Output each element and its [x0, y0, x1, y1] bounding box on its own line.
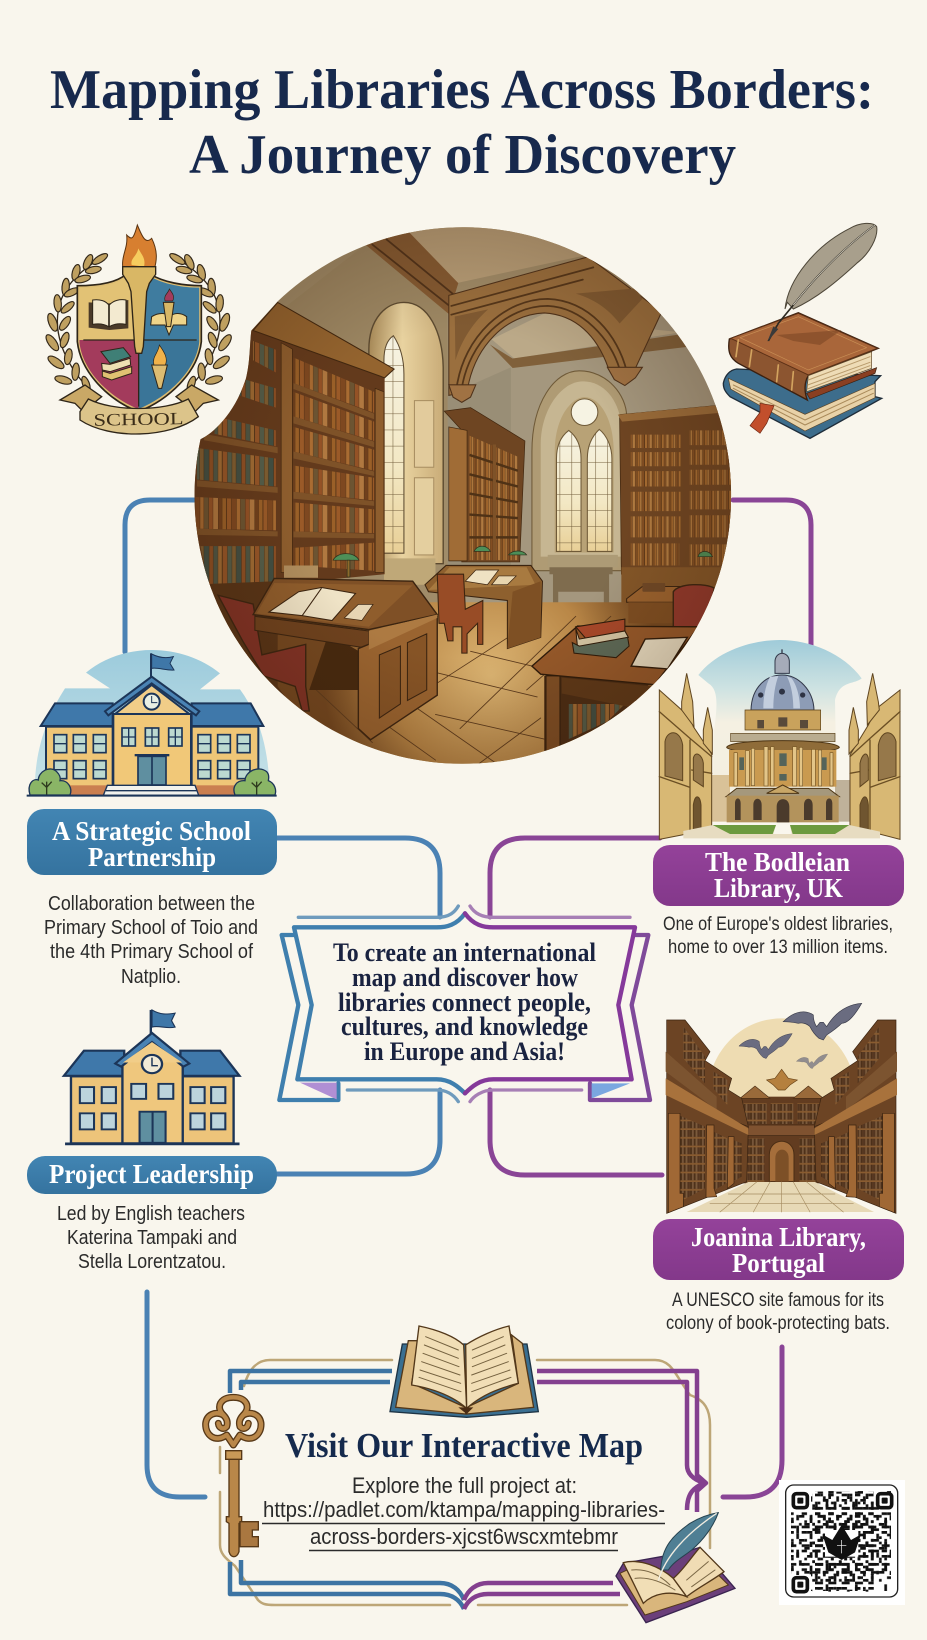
text: leadership description: Katerina Tampaki and — [67, 1226, 237, 1249]
door and steps — [103, 754, 199, 795]
windows — [54, 728, 250, 779]
banner frame — [279, 906, 650, 1102]
crest ornament — [767, 1069, 797, 1090]
right bookcase — [620, 405, 740, 574]
banner text: cultures, and knowledge — [341, 1012, 588, 1041]
lower blue book — [723, 369, 882, 438]
laurel wreath — [44, 252, 234, 393]
text: partnership description: Natplio. — [121, 965, 181, 988]
main desk — [309, 642, 358, 690]
icon: school building with sky — [27, 650, 277, 796]
flag — [151, 653, 174, 677]
right red chair — [673, 585, 714, 627]
background buildings — [712, 775, 730, 822]
badge: A Strategic School Partnership: A Strategic School — [52, 816, 251, 846]
left red chair — [218, 595, 309, 711]
middle chair — [437, 574, 483, 653]
upper brown book — [729, 313, 878, 400]
title — [50, 59, 874, 186]
text: partnership description: Primary School of Toio and — [44, 916, 258, 939]
arch spandrel — [449, 257, 662, 395]
middle desk — [425, 565, 542, 649]
quill feather — [767, 223, 877, 342]
text: leadership description: Stella Lorentzatou. — [78, 1250, 226, 1273]
connector: blue link from leadership to map panel — [147, 1292, 205, 1497]
icon: antique key — [206, 1397, 261, 1557]
icon: stacked books with quill — [723, 223, 882, 438]
text: Joanina description — [666, 1290, 890, 1334]
text: Bodleian description: One of Europe's oldest libraries, — [663, 914, 893, 935]
connector: blue link from leadership badge to banner — [277, 1090, 440, 1174]
connector: blue link from partnership badge to banner — [277, 838, 440, 917]
wings — [41, 677, 263, 795]
badge: Joanina Library, Portugal: Joanina Library, — [691, 1222, 866, 1252]
left cornice — [365, 231, 458, 314]
text: Bodleian description: home to over 13 million items. — [668, 937, 888, 958]
central painting: library reading room — [190, 220, 740, 770]
drum — [726, 710, 839, 822]
badge: Project Leadership: Project Leadership — [49, 1159, 254, 1189]
centre bookcase — [444, 408, 525, 562]
text: Bodleian description — [663, 914, 893, 958]
banner text: map and discover how — [352, 963, 578, 992]
text: padlet url: https://padlet.com/ktampa/mapping-libraries- — [263, 1497, 665, 1522]
text: partnership description — [44, 892, 258, 988]
text: padlet url: across-borders-xjcst6wscxmtebmr — [310, 1524, 618, 1549]
badge: The Bodleian Library, UK — [653, 845, 904, 906]
text: padlet url — [262, 1497, 665, 1550]
title: Mapping Libraries Across Borders: — [50, 59, 874, 121]
connector: purple link from Bodleian to banner — [490, 838, 660, 917]
badge: Joanina Library, Portugal: Portugal — [732, 1248, 825, 1278]
lawn — [683, 825, 880, 838]
heading: visit our interactive map: Visit Our Interactive Map — [285, 1426, 643, 1465]
right back table — [627, 586, 681, 602]
icon: open book with quill — [616, 1513, 735, 1623]
icon: open book on top of frame — [390, 1326, 538, 1417]
side buildings — [659, 673, 900, 839]
connector: top blue line from painting to school — [125, 500, 198, 652]
text: Joanina description: A UNESCO site famous for its — [672, 1290, 884, 1311]
back wall — [742, 1097, 822, 1183]
bats — [739, 1003, 862, 1069]
text: partnership description: the 4th Primary School of — [50, 940, 253, 963]
central banner — [279, 906, 650, 1102]
foreground table — [544, 676, 648, 752]
badge: A Strategic School Partnership — [27, 809, 277, 875]
gold outer frame — [220, 1360, 710, 1605]
title: A Journey of Discovery — [189, 124, 736, 186]
right window — [532, 371, 627, 571]
shield — [77, 274, 202, 412]
text: Joanina description: colony of book-protecting bats. — [666, 1313, 890, 1334]
left bookcase — [190, 302, 393, 592]
icon: second school building — [64, 1010, 240, 1144]
illustration: Joanina Library with bats — [666, 1003, 897, 1213]
back wall — [448, 308, 740, 609]
right wall — [814, 1020, 897, 1213]
ribbon — [60, 385, 218, 434]
banner text: in Europe and Asia! — [364, 1037, 565, 1066]
sky — [35, 650, 269, 795]
torch — [123, 225, 156, 353]
panel: visit our interactive map — [206, 1326, 735, 1623]
sky dome — [707, 1018, 857, 1100]
tiled floor — [687, 1182, 874, 1212]
dome — [751, 649, 814, 710]
badge: The Bodleian Library, UK: Library, UK — [714, 873, 843, 903]
banner text: libraries connect people, — [338, 988, 591, 1017]
ribbon: SCHOOL — [93, 409, 184, 430]
illustration: Bodleian Library — [659, 640, 900, 839]
badge: Project Leadership — [27, 1156, 277, 1194]
lamps — [333, 546, 713, 577]
banner text — [333, 938, 596, 1066]
text: partnership description: Collaboration between the — [48, 892, 255, 915]
QR code — [779, 1480, 905, 1605]
floor — [216, 602, 709, 764]
connector: top purple line from painting to Bodleian — [733, 500, 811, 645]
left wall — [362, 245, 366, 247]
bushes — [29, 769, 276, 795]
badge: A Strategic School Partnership: Partnership — [88, 842, 216, 872]
blue frame lines — [230, 1371, 464, 1609]
badge: The Bodleian Library, UK: The Bodleian — [705, 847, 850, 877]
connector: purple link from Joanina to banner — [490, 1090, 662, 1175]
sky — [698, 640, 862, 790]
banner text: To create an international — [333, 938, 596, 967]
text: explore line: Explore the full project at: — [352, 1473, 577, 1498]
badge: Joanina Library, Portugal — [653, 1219, 904, 1280]
purple frame lines — [464, 1371, 706, 1609]
connector: purple link from Joanina to map panel — [723, 1347, 782, 1497]
icon: school crest — [44, 225, 234, 434]
text: leadership description: Led by English teachers — [57, 1202, 245, 1225]
left wall — [667, 1020, 748, 1213]
text: leadership description — [57, 1202, 245, 1273]
ceiling — [410, 227, 584, 283]
left window recess — [369, 302, 443, 564]
